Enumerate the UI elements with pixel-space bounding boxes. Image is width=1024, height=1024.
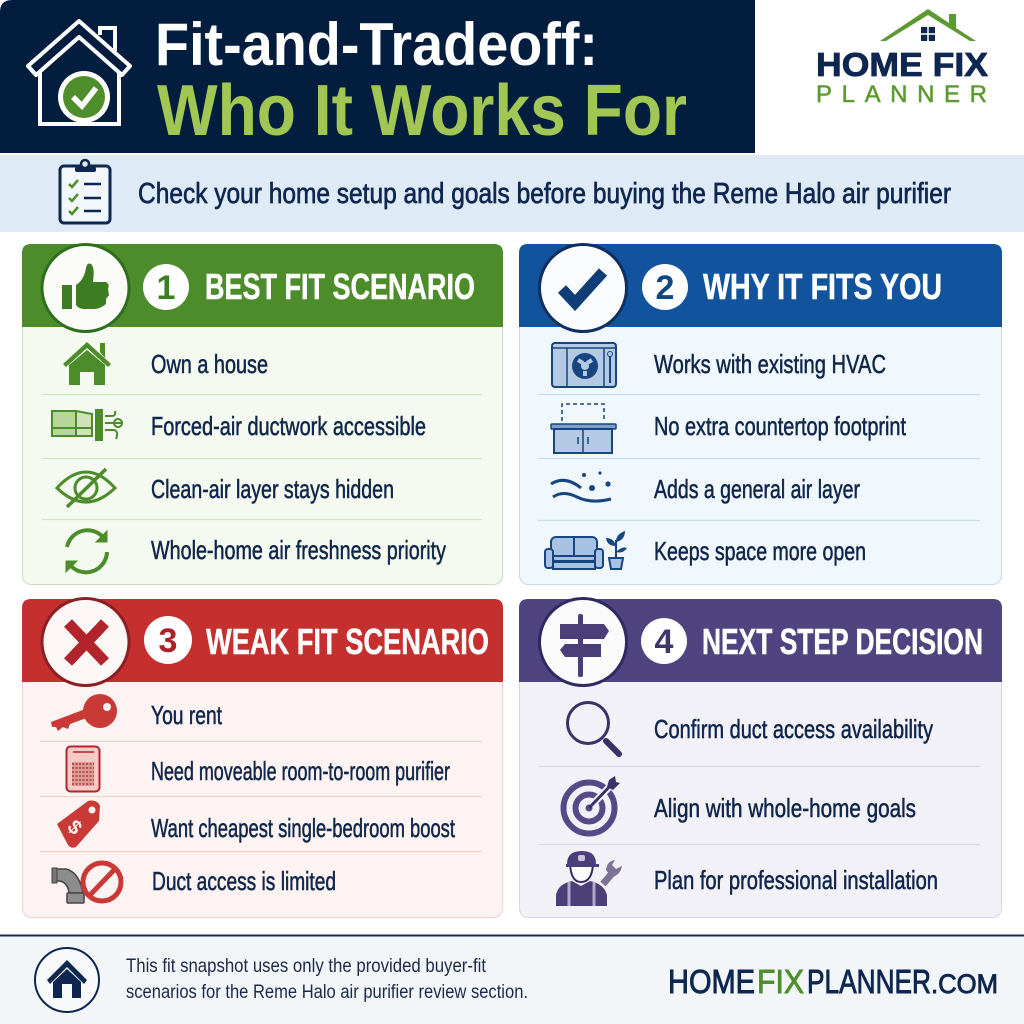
row: whole-home freshness: Whole-home air freshness priority (151, 535, 446, 565)
icon: countertop (551, 404, 616, 453)
row: works with HVAC: Works with existing HVAC (654, 349, 886, 379)
icon: price tag: $ (63, 816, 86, 839)
row: general air layer (551, 471, 860, 504)
title (155, 11, 687, 151)
icon: signpost (540, 598, 626, 686)
row: keeps space open: Keeps space more open (654, 536, 866, 566)
footer note: scenarios for the Reme Halo air purifier review section. (126, 982, 528, 1003)
row: duct access limited: Duct access is limited (152, 866, 336, 896)
row: you rent (51, 694, 223, 731)
row: clean-air layer hidden (57, 469, 394, 507)
row: no countertop footprint: No extra countertop footprint (654, 411, 907, 441)
row: moveable purifier (66, 746, 450, 792)
row: forced-air ductwork (52, 410, 426, 441)
row: align goals (564, 776, 916, 834)
logo: HOME FIX (816, 46, 988, 83)
logo (816, 9, 988, 108)
badge: 4: 4 (655, 623, 674, 661)
badge: 2 (642, 264, 688, 310)
icon: house (63, 342, 111, 385)
footer website: PLANNER (807, 963, 931, 1000)
footer (0, 934, 1024, 1024)
panel: next step decision (519, 598, 1002, 918)
badge: 4 (641, 618, 687, 664)
icon: price tag (57, 801, 100, 848)
icon: footer home badge (35, 948, 99, 1012)
heading: BEST FIT SCENARIO (205, 266, 475, 307)
badge: 1: 1 (157, 269, 175, 307)
row: moveable purifier: Need moveable room-to-room purifier (151, 756, 450, 786)
icon: refresh arrows (66, 530, 107, 572)
badge: 1 (143, 264, 189, 310)
icon: hidden eye (57, 469, 115, 507)
icon: duct with airflow (52, 410, 123, 440)
badge: 2: 2 (656, 269, 674, 307)
heading: WEAK FIT SCENARIO (206, 621, 489, 662)
row: forced-air ductwork: Forced-air ductwork accessible (151, 411, 426, 441)
header banner (0, 0, 755, 153)
icon: magnifier (568, 702, 619, 754)
icon: check mark (540, 244, 626, 332)
row: cheapest boost: Want cheapest single-bedroom boost (151, 813, 456, 843)
row: general air layer: Adds a general air layer (654, 474, 860, 504)
panel: why it fits you (519, 244, 1002, 584)
footer website: HOME (668, 963, 755, 1000)
icon: clipboard checklist (60, 160, 110, 223)
panel: best fit scenario (22, 244, 503, 584)
title: Who It Works For (157, 71, 687, 151)
icon: house with check (28, 21, 130, 124)
row: professional installation (556, 851, 938, 906)
row: you rent: You rent (151, 700, 223, 730)
row: no countertop footprint (551, 404, 907, 453)
row: works with HVAC (552, 343, 886, 387)
icon: pipe with prohibited sign (52, 863, 121, 903)
footer website (668, 963, 998, 1000)
footer note (126, 956, 528, 1003)
row: professional installation: Plan for professional installation (654, 865, 938, 895)
row: own a house (63, 342, 268, 385)
panel: weak fit scenario (22, 598, 503, 918)
icon: sofa and plant (545, 531, 627, 569)
row: whole-home freshness (66, 530, 446, 572)
icon: key (51, 694, 117, 731)
icon: red cross (42, 598, 129, 686)
row: own a house: Own a house (151, 349, 268, 379)
row: align goals: Align with whole-home goals (654, 793, 916, 823)
row: confirm duct access: Confirm duct access availability (654, 714, 933, 744)
heading: WHY IT FITS YOU (703, 266, 942, 307)
badge: 3: 3 (159, 622, 177, 660)
icon: portable purifier (66, 746, 100, 792)
icon: air waves (551, 471, 611, 501)
badge: 3 (144, 616, 192, 664)
logo: PLANNER (816, 81, 987, 108)
icon: hvac unit (552, 343, 616, 387)
icon: worker with wrench (556, 851, 622, 906)
footer website: FIX (757, 963, 804, 1000)
row: cheapest boost (57, 801, 456, 848)
icon: thumbs up (42, 244, 129, 332)
row: confirm duct access (568, 702, 933, 754)
row: duct access limited (52, 863, 336, 903)
subtitle band (0, 155, 1024, 232)
title: Fit-and-Tradeoff: (155, 11, 598, 78)
row: clean-air layer hidden: Clean-air layer stays hidden (151, 474, 394, 504)
footer website: .COM (931, 969, 998, 999)
row: keeps space open (545, 531, 866, 569)
footer note: This fit snapshot uses only the provided buyer-fit (126, 956, 487, 977)
icon: target (564, 776, 620, 834)
